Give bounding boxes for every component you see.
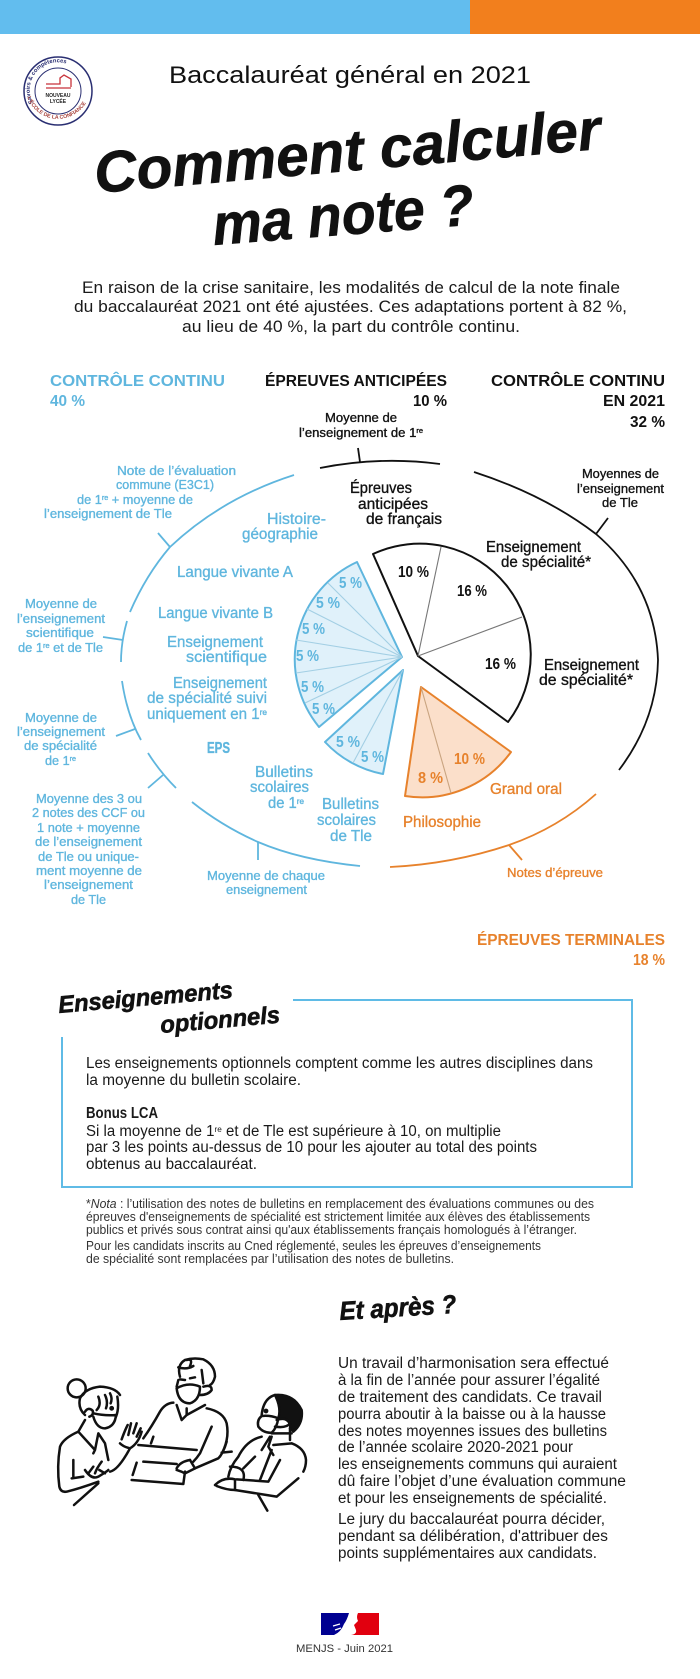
pie slice: français et spécialités: 10 % [398, 564, 429, 581]
labels: contrôle continu subjects: de Tle [330, 828, 372, 845]
text block: et après: et pour les enseignements de spécialité. [338, 1490, 607, 1507]
callouts: how each blue subject is graded: re [43, 641, 50, 650]
pie slice: bulletins scolaires: 5 % [336, 734, 360, 751]
labels: contrôle continu subjects: Histoire- [267, 511, 326, 528]
text block: et après: Le jury du baccalauréat pourra décider, [338, 1511, 605, 1528]
man in the centre [132, 1358, 232, 1484]
callouts: how each blue subject is graded: de 1 [77, 492, 103, 507]
text block: et après: points supplémentaires aux candidats. [338, 1545, 597, 1562]
outer arc: épreuves terminales (orange) [390, 794, 596, 867]
logo: Nouveau lycée: Savoirs & compétences [26, 59, 66, 104]
callouts: how each blue subject is graded: de l’enseignement [35, 834, 142, 849]
pie slice: contrôle continu, six subjects [295, 562, 402, 727]
main title: ma note ? [210, 173, 476, 258]
intro paragraph: En raison de la crise sanitaire, les modalités de calcul de la note finale [82, 279, 620, 297]
logo: Nouveau lycée [23, 56, 93, 126]
footnote: nota: publics et privés sous contrat ainsi qu'aux établissements français homologués à l’étranger. [86, 1222, 577, 1237]
panel frame [62, 1000, 632, 1187]
heading: contrôle continu en 2021 32 %: EN 2021 [603, 393, 665, 410]
intro paragraph [74, 279, 627, 336]
logo: Nouveau lycée: NOUVEAU [45, 93, 71, 99]
text block: et après: à la fin de l’année pour assurer l’égalité [338, 1372, 600, 1389]
labels: épreuves anticipées and spécialités: de français [366, 511, 442, 528]
callouts: how each blue subject is graded: de Tle ou unique- [38, 849, 139, 864]
panel heading: optionnels [159, 1002, 281, 1039]
pie slice: contrôle continu, six subjects: 5 % [312, 701, 335, 718]
panel text: Bonus LCA [86, 1105, 158, 1122]
labels: épreuves anticipées and spécialités: Épreuves [350, 480, 412, 497]
callouts: how each blue subject is graded: ment moyenne de [36, 863, 142, 878]
pie slice: épreuves terminales [405, 687, 511, 797]
logo: French Republic flag [321, 1613, 379, 1635]
labels: contrôle continu subjects: uniquement en 1 [147, 706, 262, 723]
callouts: how each blue subject is graded: enseignement [226, 882, 307, 897]
labels: contrôle continu subjects: Enseignement [173, 675, 268, 692]
labels: épreuves terminales [403, 781, 603, 880]
panel text: et de Tle est supérieure à 10, on multiplie [222, 1123, 501, 1140]
panel text: Les enseignements optionnels comptent comme les autres disciplines dans [86, 1055, 593, 1072]
callouts: how each blue subject is graded: l’enseignement [17, 724, 105, 739]
top colour bar [0, 0, 700, 34]
outer arc: épreuves anticipées (black) [320, 448, 440, 468]
panel text [86, 1055, 593, 1173]
callouts: how each blue subject is graded: Note de l’évaluation [117, 463, 236, 478]
text block: et après: pendant sa délibération, d'attribuer des [338, 1528, 608, 1545]
labels: contrôle continu subjects: Langue vivante B [158, 605, 273, 622]
footnote: nota: de spécialité sont remplacées par l’utilisation des notes de bulletins. [86, 1251, 454, 1266]
logo: Nouveau lycée: LYCÉE [50, 97, 67, 105]
callouts: how each blue subject is graded: 2 notes des CCF ou [32, 805, 145, 820]
panel text: re [214, 1124, 222, 1134]
callouts: how each blue subject is graded: scientifique [26, 625, 94, 640]
intro paragraph: du baccalauréat 2021 ont été ajustées. Ces adaptations portent à 82 %, [74, 298, 627, 316]
pie slice: bulletins scolaires: 5 % [361, 749, 384, 766]
text block: et après [338, 1355, 626, 1562]
labels: contrôle continu subjects: Bulletins [322, 796, 379, 813]
callouts: how each blue subject is graded: 1 note + moyenne [37, 820, 140, 835]
labels: contrôle continu subjects [147, 511, 379, 845]
labels: contrôle continu subjects: Langue vivante A [177, 564, 294, 581]
callouts: how each blue subject is graded: et de Tle [50, 640, 103, 655]
callouts: how each blue subject is graded: Moyenne de [25, 710, 97, 725]
callouts: how each blue subject is graded: re [102, 493, 108, 502]
pie slice: contrôle continu, six subjects: 5 % [316, 595, 340, 612]
labels: épreuves anticipées and spécialités: de spécialité* [539, 672, 633, 689]
panel: enseignements optionnels [57, 977, 632, 1187]
labels: contrôle continu subjects: de spécialité suivi [147, 690, 267, 707]
labels: épreuves anticipées and spécialités: Enseignement [544, 657, 640, 674]
callouts: how each blue subject is graded: l’enseignement [44, 877, 133, 892]
labels: épreuves anticipées and spécialités: re [416, 426, 423, 435]
panel heading: Enseignements [57, 977, 234, 1019]
labels: épreuves anticipées and spécialités: anticipées [358, 496, 428, 513]
footnote: nota: épreuves d'enseignements de spécialité est strictement limitée aux élèves des établissements [86, 1209, 590, 1224]
illustration: three masked people at a table [58, 1358, 306, 1511]
text block: et après: les enseignements communs qui auraient [338, 1456, 618, 1473]
labels: épreuves anticipées and spécialités: l’enseignement [577, 481, 664, 496]
labels: contrôle continu subjects: scolaires [317, 812, 376, 829]
heading: épreuves anticipées 10 %: 10 % [413, 393, 447, 410]
callouts: how each blue subject is graded: Moyenne des 3 ou [36, 791, 142, 806]
heading: contrôle continu 40 %: 40 % [50, 393, 85, 410]
heading: contrôle continu 40 %: CONTRÔLE CONTINU [50, 371, 225, 390]
heading: épreuves terminales 18 % [477, 930, 665, 969]
footnote: nota: Pour les candidats inscrits au Cned réglementé, seules les épreuves d’enseignements [86, 1238, 541, 1253]
labels: contrôle continu subjects: EPS [207, 740, 230, 757]
callouts: how each blue subject is graded: Moyenne de [25, 596, 97, 611]
labels: épreuves anticipées and spécialités: Moyenne de [325, 410, 397, 425]
supertitle: Baccalauréat général en 2021 [169, 62, 531, 89]
panel text: la moyenne du bulletin scolaire. [86, 1072, 301, 1089]
labels: épreuves terminales: Grand oral [490, 781, 562, 798]
text block: et après: dû faire l’objet d’une évaluation commune [338, 1473, 626, 1490]
labels: contrôle continu subjects: de 1 [268, 795, 298, 812]
callouts: how each blue subject is graded: de spécialité [24, 738, 97, 753]
labels: épreuves anticipées and spécialités: de spécialité* [501, 554, 591, 571]
footnote: nota: *Nota : l’utilisation des notes de bulletins en remplacement des évaluations communes ou des [86, 1196, 594, 1211]
main title: Comment calculer [91, 97, 607, 206]
footer credit: MENJS - Juin 2021 [296, 1643, 393, 1655]
labels: épreuves anticipées and spécialités: l’enseignement de 1 [299, 425, 417, 440]
pie slice: contrôle continu, six subjects: 5 % [302, 621, 325, 638]
callouts: how each blue subject is graded: de 1 [45, 753, 71, 768]
heading: contrôle continu en 2021 32 %: 32 % [630, 414, 665, 431]
heading: contrôle continu en 2021 32 %: CONTRÔLE CONTINU [491, 371, 665, 390]
main title [91, 97, 607, 258]
labels: contrôle continu subjects: Enseignement [167, 634, 264, 651]
pie slice: français et spécialités: 16 % [457, 583, 487, 600]
pie slice: bulletins scolaires [325, 670, 403, 774]
heading: épreuves terminales 18 %: 18 % [633, 952, 665, 969]
labels: contrôle continu subjects: re [260, 707, 267, 717]
pie slice: français et spécialités [373, 544, 531, 722]
callouts: how each blue subject is graded: commune (E3C1) [116, 477, 214, 492]
callouts: how each blue subject is graded: l’enseignement [17, 611, 105, 626]
woman [58, 1379, 142, 1505]
pie slice: épreuves terminales: 10 % [454, 751, 485, 768]
labels: épreuves anticipées and spécialités: de Tle [602, 495, 638, 510]
callouts: how each blue subject is graded [17, 463, 325, 907]
text block: et après: des notes moyennes issues des bulletins [338, 1423, 607, 1440]
text block: et après: de l’année scolaire 2020-2021 pour [338, 1439, 573, 1456]
intro paragraph: au lieu de 40 %, la part du contrôle continu. [182, 318, 520, 336]
pie slice: contrôle continu, six subjects: 5 % [301, 679, 324, 696]
text block: et après: Un travail d’harmonisation sera effectué [338, 1355, 609, 1372]
labels: contrôle continu subjects: scientifique [186, 649, 267, 666]
callouts: how each blue subject is graded: Moyenne de chaque [207, 868, 325, 883]
labels: contrôle continu subjects: géographie [242, 526, 318, 543]
callouts: how each blue subject is graded: re [70, 754, 76, 763]
outer arc: contrôle continu 2021 (black) [474, 472, 658, 770]
heading: contrôle continu en 2021 32 % [491, 371, 665, 431]
panel text: obtenus au baccalauréat. [86, 1156, 257, 1173]
panel text: par 3 les points au-dessus de 10 pour les ajouter au total des points [86, 1139, 537, 1156]
heading: épreuves terminales 18 %: ÉPREUVES TERMINALES [477, 930, 665, 949]
man on the right [215, 1395, 306, 1511]
panel text: Si la moyenne de 1 [86, 1123, 219, 1140]
heading: et après: Et après ? [339, 1289, 457, 1326]
heading: contrôle continu 40 % [50, 371, 225, 410]
labels: contrôle continu subjects: Bulletins [255, 764, 313, 781]
labels: épreuves terminales: Notes d’épreuve [507, 865, 603, 880]
logo: Nouveau lycée: L'ÉCOLE DE LA CONFIANCE [28, 96, 86, 119]
callouts: how each blue subject is graded: l’enseignement de Tle [44, 506, 172, 521]
panel heading [57, 977, 281, 1039]
text block: et après: pourra aboutir à la baisse ou à la hausse [338, 1406, 606, 1423]
pie slice: français et spécialités: 16 % [485, 656, 516, 673]
text block: et après: de traitement des candidats. Ce travail [338, 1389, 602, 1406]
pie slice: épreuves terminales: 8 % [418, 770, 443, 787]
heading: épreuves anticipées 10 %: ÉPREUVES ANTICIPÉES [265, 371, 447, 390]
labels: contrôle continu subjects: scolaires [250, 779, 309, 796]
callouts: how each blue subject is graded: de Tle [71, 892, 106, 907]
heading: épreuves anticipées 10 % [265, 371, 447, 410]
callouts: how each blue subject is graded: + moyenne de [108, 492, 193, 507]
labels: épreuves terminales: Philosophie [403, 814, 481, 831]
labels: contrôle continu subjects: re [297, 796, 304, 806]
outer arc: contrôle continu (blue) [103, 475, 360, 866]
callouts: how each blue subject is graded: de 1 [18, 640, 44, 655]
pie slice: contrôle continu, six subjects: 5 % [296, 648, 319, 665]
pie slice: contrôle continu, six subjects: 5 % [339, 575, 362, 592]
labels: épreuves anticipées and spécialités: Enseignement [486, 539, 582, 556]
labels: épreuves anticipées and spécialités [299, 410, 664, 689]
labels: épreuves anticipées and spécialités: Moyennes de [582, 466, 659, 481]
footnote: nota [86, 1196, 594, 1266]
